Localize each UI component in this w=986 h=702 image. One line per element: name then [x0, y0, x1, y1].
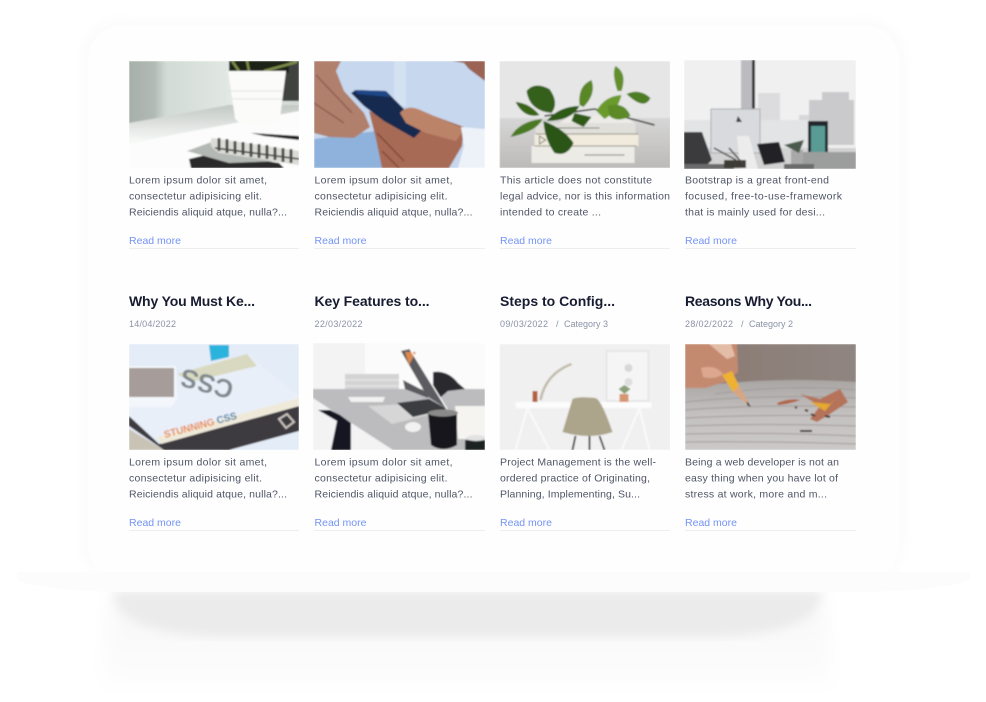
text: excerpt: Lorem ipsum dolor sit amet,: [314, 174, 452, 186]
image: books with green branch: [500, 61, 670, 168]
link: read more: Read more: [129, 235, 181, 247]
panel: card 5: Reiciendis aliquid atque, nulla?...: [129, 488, 287, 500]
panel: card 5: [129, 293, 299, 531]
link: read more: Read more: [500, 517, 552, 529]
image: CSS books and phone: CSS: [177, 362, 237, 405]
image: desk with notebook and plant: [129, 61, 299, 168]
panel: card 6: [313, 293, 486, 531]
meta: date and category: 09/03/2022: [500, 319, 548, 329]
panel: card 6: Reiciendis aliquid atque, nulla?...: [314, 488, 472, 500]
panel: card 3: intended to create ...: [500, 206, 601, 218]
heading: Key Features to...: [314, 293, 430, 309]
link: read more: Read more: [685, 517, 737, 529]
image: CSS books and phone: STUNNING CSS: [163, 411, 239, 441]
text: excerpt: Project Management is the well-: [500, 456, 656, 468]
text: excerpt: Lorem ipsum dolor sit amet,: [314, 456, 452, 468]
panel: card 1: [129, 61, 299, 249]
date: 14/04/2022: [129, 319, 176, 329]
panel: card 5: consectetur adipisicing elit.: [129, 472, 262, 484]
panel: card 7: Planning, Implementing, Su...: [500, 488, 640, 500]
link: read more: Read more: [129, 517, 181, 529]
panel: card 2: consectetur adipisicing elit.: [314, 190, 448, 202]
link: read more: Read more: [685, 235, 737, 247]
image: hands holding phone: [314, 61, 485, 168]
panel: card 8: /: [741, 319, 744, 329]
link: read more: Read more: [314, 517, 367, 529]
panel: card 2: Reiciendis aliquid atque, nulla?...: [314, 206, 472, 218]
panel: card 1: Reiciendis aliquid atque, nulla?...: [129, 206, 287, 218]
panel: card 1: consectetur adipisicing elit.: [129, 190, 262, 202]
heading: Reasons Why You...: [685, 293, 812, 309]
panel: card 7: Category 3: [564, 319, 608, 329]
image: desk with laptop and camera lens: [313, 344, 485, 450]
panel: card 3: [500, 61, 670, 249]
panel: card 7: /: [556, 319, 559, 329]
image: office with iMac: [684, 60, 856, 169]
text: excerpt: Being a web developer is not an: [685, 456, 839, 468]
image: white desk and chair: [500, 344, 670, 450]
panel: card 8: Category 2: [749, 319, 793, 329]
image: CSS books and phone: [129, 344, 299, 450]
panel: card 4: focused, free-to-use-framework: [685, 190, 843, 202]
laptop screen: [80, 18, 907, 583]
link: read more: Read more: [500, 235, 552, 247]
panel: card 8: stress at work, more and m...: [685, 488, 827, 500]
link: read more: Read more: [314, 235, 367, 247]
laptop drop shadow: [100, 592, 835, 695]
panel: card 8: [685, 293, 856, 531]
panel: card 7: [500, 293, 670, 531]
text: excerpt: This article does not constitute: [500, 174, 652, 186]
panel: card 4: [684, 60, 856, 249]
text: excerpt: Bootstrap is a great front-end: [685, 174, 829, 186]
image: pencil and shavings: [685, 344, 856, 450]
heading: Why You Must Ke...: [129, 293, 255, 309]
date: 22/03/2022: [314, 319, 362, 329]
text: excerpt: Lorem ipsum dolor sit amet,: [129, 174, 267, 186]
panel: card 6: consectetur adipisicing elit.: [314, 472, 448, 484]
panel: card 8: easy thing when you have lot of: [685, 472, 838, 484]
laptop base: [17, 572, 970, 592]
panel: card 2: [314, 61, 485, 249]
text: excerpt: Lorem ipsum dolor sit amet,: [129, 456, 267, 468]
panel: card 4: that is mainly used for desi...: [685, 206, 825, 218]
heading: Steps to Config...: [500, 293, 615, 309]
meta: date and category: 28/02/2022: [685, 319, 733, 329]
panel: card 7: ordered practice of Originating,: [500, 472, 650, 484]
panel: card 3: legal advice, nor is this information: [500, 190, 670, 202]
